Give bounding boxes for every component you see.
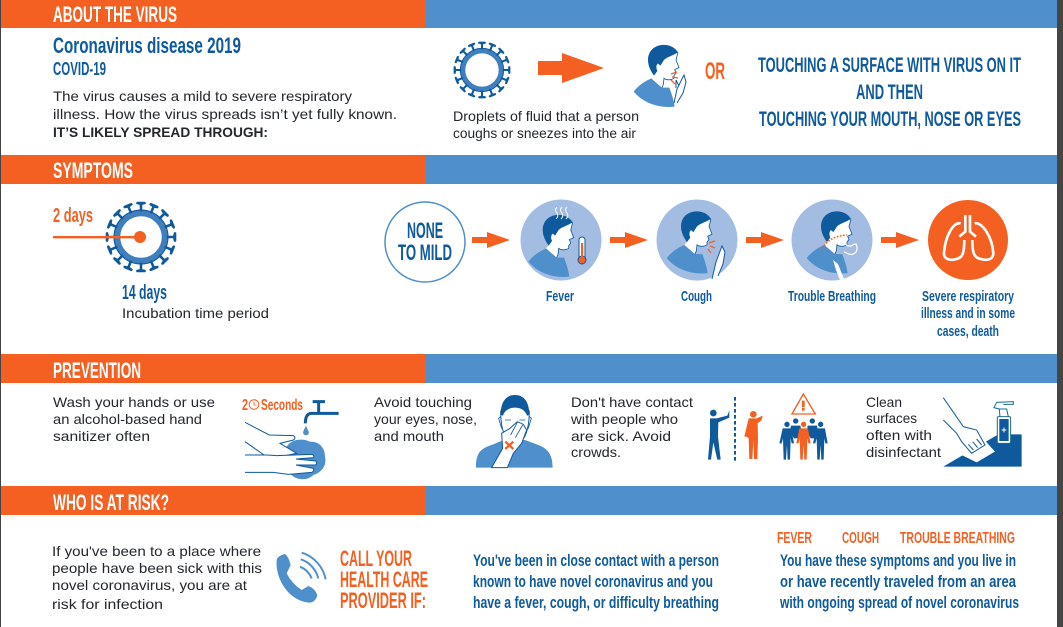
heading: call your provider: CALL YOUR — [340, 546, 412, 571]
text: virus description — [53, 88, 397, 140]
label: 2 days: 2 days — [53, 205, 93, 227]
heading: disease name: Coronavirus disease 2019 — [53, 33, 241, 58]
text: clean surfaces — [866, 394, 941, 460]
arrow: droplets — [538, 53, 604, 83]
header bar: prevention — [1, 354, 1057, 383]
text: clean surfaces: often with — [866, 427, 932, 443]
text: virus description: The virus causes a mild to severe respiratory — [53, 88, 352, 104]
panel: about the virus — [1, 0, 1057, 141]
text: close contact: have a fever, cough, or difficulty breathing — [473, 593, 719, 612]
text: risk of infection: novel coronavirus, you are at — [52, 577, 247, 593]
text: avoid touching: and mouth — [374, 428, 444, 444]
header bar: who is at risk — [1, 486, 1057, 515]
label: cough: Cough — [681, 288, 712, 305]
heading: call your provider: HEALTH CARE — [340, 567, 428, 592]
text: no contact — [570, 394, 693, 460]
text: risk of infection: If you've been to a place where — [52, 543, 261, 559]
icon: social distancing — [708, 394, 828, 462]
header bar: symptoms: SYMPTOMS — [53, 158, 133, 183]
text: close contact — [473, 551, 719, 612]
text: clean surfaces: surfaces — [866, 410, 917, 426]
icon: incubation virus — [53, 202, 176, 272]
icon: phone — [277, 553, 326, 603]
text: touching a surface: AND THEN — [856, 81, 923, 104]
stage: none to mild: TO MILD — [398, 240, 452, 265]
text: wash hands: an alcohol-based hand — [53, 411, 202, 427]
text: droplets caption: Droplets of fluid that a person — [453, 108, 639, 124]
label: OR: OR — [705, 58, 725, 85]
label: trouble breathing: Trouble Breathing — [788, 288, 876, 305]
header bar: symptoms — [1, 155, 1057, 184]
text: no contact: with people who — [570, 411, 678, 427]
text: risk of infection — [52, 543, 262, 612]
panel: who is at risk — [1, 486, 1057, 613]
text: wash hands: sanitizer often — [53, 428, 150, 444]
stage: none to mild: NONE — [407, 218, 443, 243]
stage: trouble breathing — [792, 200, 872, 280]
label: severe illness: illness and in some — [921, 305, 1015, 322]
icon: virus — [454, 42, 510, 98]
text: droplets caption: coughs or sneezes into the air — [453, 125, 636, 141]
text: no contact: Don't have contact — [571, 394, 693, 410]
text: avoid touching: Avoid touching — [374, 394, 472, 410]
icon: washing hands — [242, 397, 339, 479]
icon: cleaning surface — [943, 398, 1022, 467]
arrow 3 — [746, 232, 784, 248]
page frame left — [0, 0, 1, 627]
label: 14 days: 14 days — [122, 282, 167, 304]
header bar: about the virus — [1, 0, 1057, 28]
text: close contact: known to have novel coronavirus and you — [473, 572, 713, 591]
subheading: COVID-19: COVID-19 — [53, 59, 106, 79]
text: risk of infection: risk for infection — [52, 596, 163, 612]
text: virus description: IT’S LIKELY SPREAD THROUGH: — [53, 124, 268, 140]
text: wash hands: Wash your hands or use — [53, 394, 215, 410]
text: close contact: You've been in close contact with a person — [473, 551, 719, 570]
text: symptoms and travel — [779, 551, 1019, 612]
text: avoid touching — [374, 394, 477, 444]
stage: none to mild — [385, 202, 465, 282]
icon: washing hands: 2 — [242, 397, 248, 414]
text: avoid touching: your eyes, nose, — [374, 411, 477, 427]
text: clean surfaces: Clean — [866, 394, 902, 410]
text: droplets caption — [453, 108, 639, 141]
arrow 2 — [610, 232, 648, 248]
text: incubation period: Incubation time period — [122, 305, 269, 321]
labels: symptom list: COUGH — [842, 530, 879, 547]
labels: symptom list — [777, 530, 1015, 547]
label: severe illness: Severe respiratory — [922, 288, 1014, 305]
stage: fever — [520, 200, 602, 280]
stage: severe illness — [928, 200, 1008, 280]
arrow 1 — [472, 232, 510, 248]
icon: washing hands: Seconds — [261, 397, 303, 414]
page frame right — [1057, 0, 1063, 627]
panel: symptoms — [1, 155, 1057, 340]
label: fever: Fever — [546, 288, 574, 305]
text: touching a surface — [758, 54, 1021, 131]
heading: call your provider — [340, 546, 428, 613]
icon: face with hand — [476, 395, 553, 468]
label: severe illness — [921, 288, 1015, 340]
labels: symptom list: FEVER — [777, 530, 812, 547]
header bar: who is at risk: WHO IS AT RISK? — [53, 490, 169, 515]
label: severe illness: cases, death — [937, 323, 999, 340]
arrow 4 — [881, 232, 919, 248]
panel: prevention — [1, 354, 1057, 479]
text: risk of infection: people have been sick with this — [52, 560, 262, 576]
heading: call your provider: PROVIDER IF: — [340, 588, 426, 613]
text: no contact: crowds. — [571, 444, 621, 460]
header bar: prevention: PREVENTION — [53, 358, 141, 383]
icon: person coughing — [634, 45, 686, 107]
text: virus description: illness. How the virus spreads isn’t yet fully known. — [53, 106, 397, 122]
text: clean surfaces: disinfectant — [866, 444, 941, 460]
text: wash hands — [53, 394, 215, 444]
text: no contact: are sick. Avoid — [571, 428, 671, 444]
stage: cough — [656, 200, 738, 280]
header bar: about the virus: ABOUT THE VIRUS — [53, 2, 177, 27]
